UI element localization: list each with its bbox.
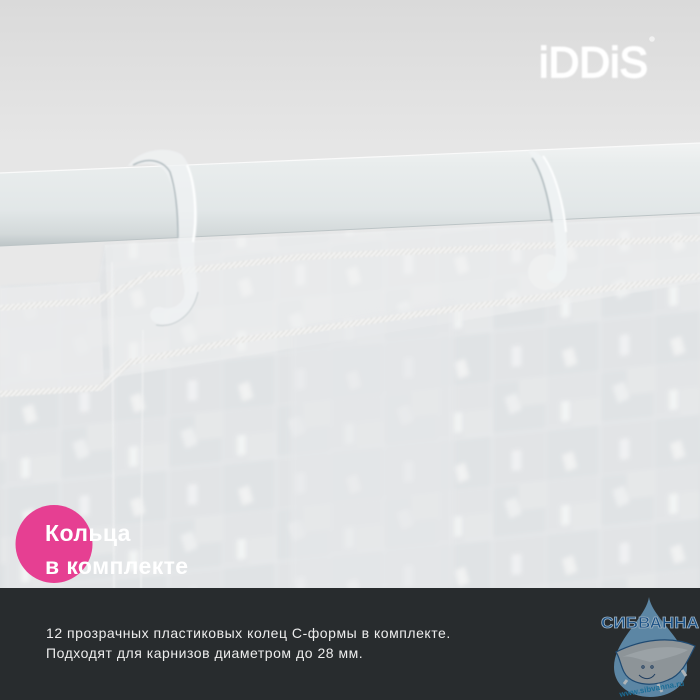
logo url: www.sibvanna.ru xyxy=(618,679,685,699)
tub legs xyxy=(624,670,686,692)
tub rim xyxy=(622,647,688,662)
centre pale fold xyxy=(290,300,455,590)
logo: Sibvanna xyxy=(601,597,699,699)
ring right eyelet xyxy=(528,254,564,290)
drop xyxy=(614,597,687,697)
bathtub xyxy=(616,640,695,684)
rope top hem xyxy=(0,238,700,308)
dark footer band xyxy=(0,588,700,700)
pink blob xyxy=(16,505,92,583)
footer description: Подходят для карнизов диаметром до 28 мм. xyxy=(46,645,363,661)
brand logo IDDIS: iDDiS xyxy=(539,39,648,87)
logo wordmark: СИБВАННА xyxy=(601,615,699,632)
rope lower hem xyxy=(0,276,700,394)
curtain xyxy=(0,216,700,590)
footer description xyxy=(46,625,451,661)
footer description: 12 прозрачных пластиковых колец С-формы в комплекте. xyxy=(46,625,451,641)
badge heading: Кольца xyxy=(45,520,131,546)
ring right xyxy=(528,151,567,290)
ring left xyxy=(128,150,198,326)
tub face xyxy=(639,666,655,679)
curtain hem strip right xyxy=(105,216,700,378)
registered mark xyxy=(649,36,655,42)
badge heading xyxy=(45,520,188,579)
curtain hem strip left xyxy=(0,282,104,395)
vertical seam xyxy=(112,262,143,590)
curtain rod xyxy=(0,143,700,246)
badge heading: в комплекте xyxy=(45,553,188,579)
